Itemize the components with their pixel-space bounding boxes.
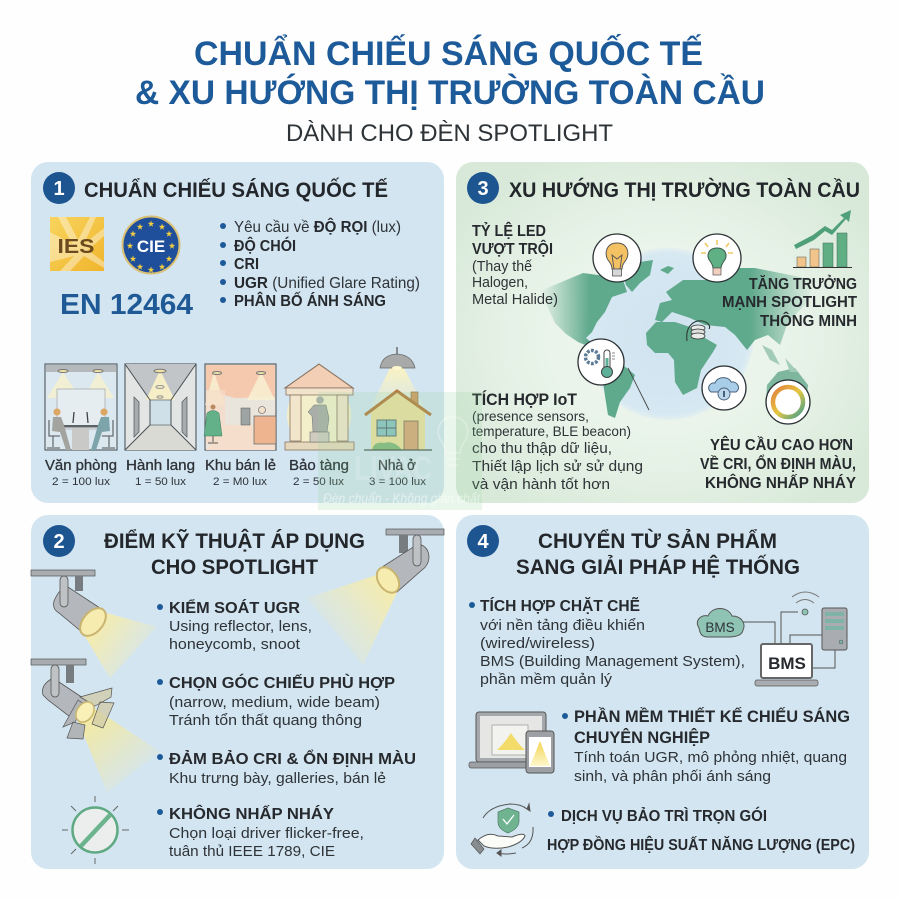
scene labels: 2 = M0 lux <box>213 476 268 488</box>
text: higher CRI requirements: KHÔNG NHẤP NHÁY <box>705 473 856 492</box>
logo: IES <box>50 217 104 271</box>
text: LED share: TỶ LỆ LED <box>472 222 546 240</box>
scene: retail <box>204 364 276 450</box>
logo: CIE: ★ <box>148 220 154 228</box>
scene: corridor <box>125 364 196 450</box>
panel 1: international lighting standards <box>31 162 444 503</box>
badge 3 <box>467 172 499 204</box>
logo: CIE: ★ <box>130 255 136 263</box>
scene labels: 2 = 50 lux <box>293 476 345 488</box>
item: tight integration: (wired/wireless) <box>480 635 595 652</box>
logo: CIE <box>122 216 180 274</box>
text: smart spotlight growth <box>722 275 858 330</box>
watermark: LIVAC <box>354 450 432 488</box>
item: flicker free: Chọn loại driver flicker-free, <box>169 825 364 842</box>
item: maintenance service <box>547 806 855 854</box>
badge 4 <box>467 525 499 557</box>
text: smart spotlight growth: THÔNG MINH <box>760 312 857 330</box>
badge 2 <box>43 525 75 557</box>
text: LED share: VƯỢT TRỘI <box>472 240 553 258</box>
scene labels: Khu bán lẻ <box>205 458 276 474</box>
text: higher CRI requirements: VỀ CRI, ỔN ĐỊNH MÀU, <box>700 454 856 473</box>
requirements list: PHÂN BỐ ÁNH SÁNG <box>234 290 386 310</box>
text: smart spotlight growth: MẠNH SPOTLIGHT <box>722 294 858 311</box>
item: lighting design software <box>562 707 850 785</box>
heading 4: SANG GIẢI PHÁP HỆ THỐNG <box>516 553 800 579</box>
scene labels: 2 = 100 lux <box>52 476 111 488</box>
watermark <box>318 392 482 510</box>
watermark: Đèn chuẩn - Không gian chất <box>323 490 481 506</box>
item: CRI and colour stability <box>157 749 416 787</box>
logo: CIE: ★ <box>166 230 172 238</box>
scene labels: Hành lang <box>126 458 195 474</box>
scene: museum <box>285 364 354 450</box>
icon: no flicker <box>62 796 129 864</box>
item: UGR control: KIỂM SOÁT UGR <box>169 598 300 617</box>
item: lighting design software: PHẦN MỀM THIẾT KẾ CHIẾU SÁNG <box>574 707 850 726</box>
heading 4: CHUYỂN TỪ SẢN PHẨM <box>538 528 777 553</box>
panel 4: from products to system solutions <box>456 515 869 869</box>
logo: CIE: ★ <box>126 242 134 250</box>
text: higher CRI requirements <box>700 435 856 492</box>
item: lighting design software: Tính toán UGR, mô phỏng nhiệt, quang <box>574 749 847 766</box>
heading 4 <box>516 528 800 579</box>
requirements list: ĐỘ CHÓI <box>234 236 296 255</box>
icon: track spotlight right top <box>372 529 444 597</box>
logo: CIE: ★ <box>136 223 144 231</box>
item: maintenance service: DỊCH VỤ BẢO TRÌ TRỌN GÓI <box>561 806 767 825</box>
scene labels <box>45 458 427 488</box>
heading 1: CHUẨN CHIẾU SÁNG QUỐC TẾ <box>84 176 388 202</box>
icon: sensor and thermometer <box>578 339 649 410</box>
item: maintenance service: HỢP ĐỒNG HIỆU SUẤT NĂNG LƯỢNG (EPC) <box>547 835 855 854</box>
text: IoT integration <box>472 390 643 493</box>
logo: CIE: CIE <box>137 237 165 256</box>
item: UGR control <box>157 598 312 653</box>
text: LED share: (Thay thế <box>472 259 532 275</box>
text: IoT integration: temperature, BLE beacon) <box>472 424 631 439</box>
text: IoT integration: TÍCH HỢP IoT <box>472 390 578 409</box>
logo: CIE: ★ <box>166 255 172 263</box>
logo: CIE: ★ <box>168 242 176 250</box>
requirements list: Yêu cầu về ĐỘ RỌI (lux) <box>234 217 401 236</box>
badge 1 <box>43 172 75 204</box>
title: CHUẨN CHIẾU SÁNG QUỐC TẾ <box>194 34 703 73</box>
light beams <box>76 570 398 792</box>
scene labels: 1 = 50 lux <box>135 476 187 488</box>
item: tight integration: phần mềm quản lý <box>480 671 613 688</box>
diagram: BMS network: BMS <box>705 620 735 635</box>
text: higher CRI requirements: YÊU CẦU CAO HƠN <box>710 435 853 454</box>
scene labels: Văn phòng <box>45 458 117 474</box>
logo: IES: IES <box>58 236 94 258</box>
text: IoT integration: Thiết lập lịch sử sử dụng <box>472 458 643 475</box>
text: smart spotlight growth: TĂNG TRƯỞNG <box>749 275 857 293</box>
text: IoT integration: cho thu thập dữ liệu, <box>472 440 612 457</box>
diagram: BMS network <box>697 592 847 686</box>
text: LED share: Metal Halide) <box>472 292 558 308</box>
text: IoT integration: (presence sensors, <box>472 409 589 424</box>
item: beam angle <box>157 673 395 729</box>
text: IoT integration: và vận hành tốt hơn <box>472 476 610 493</box>
item: tight integration: TÍCH HỢP CHẶT CHẼ <box>480 595 640 615</box>
requirements list: UGR (Unified Glare Rating) <box>234 275 420 292</box>
scene labels: 3 = 100 lux <box>369 476 427 488</box>
item: tight integration: BMS (Building Management System), <box>480 653 745 670</box>
scene labels: Bảo tàng <box>289 458 349 474</box>
item: tight integration <box>469 595 745 688</box>
icon: track spotlight with barn doors <box>31 659 114 739</box>
text: LED share <box>472 222 558 308</box>
item: UGR control: Using reflector, lens, <box>169 618 312 635</box>
item: flicker free: KHÔNG NHẤP NHÁY <box>169 804 334 823</box>
logo: CIE: ★ <box>148 266 154 274</box>
text: LED share: Halogen, <box>472 275 528 291</box>
badge 1: 1 <box>53 178 65 200</box>
logo: CIE: ★ <box>130 230 136 238</box>
item: UGR control: honeycomb, snoot <box>169 636 301 653</box>
logo: CIE: ★ <box>158 263 166 271</box>
chart: growth bars and arrow <box>793 210 852 268</box>
icon: amber LED bulb <box>593 234 641 282</box>
item: beam angle: (narrow, medium, wide beam) <box>169 694 380 711</box>
icon: CRI colour ring <box>766 380 810 424</box>
diagram: BMS network: BMS <box>768 654 806 673</box>
logo: CIE: ★ <box>136 263 144 271</box>
heading 2: CHO SPOTLIGHT <box>151 555 318 579</box>
item: CRI and colour stability: ĐẢM BẢO CRI & ỔN ĐỊNH MÀU <box>169 749 416 768</box>
heading 2: ĐIỂM KỸ THUẬT ÁP DỤNG <box>104 528 365 553</box>
icon: track spotlight left top <box>31 570 111 641</box>
item: lighting design software: sinh, và phân phối ánh sáng <box>574 768 771 785</box>
icon: cloud data <box>702 366 746 410</box>
badge 3: 3 <box>477 178 489 200</box>
icon: hand with shield <box>471 804 533 856</box>
icon: laptop and tablet <box>469 712 554 773</box>
panel 3: global market trends <box>456 162 869 503</box>
item: flicker free <box>157 804 364 860</box>
badge 2: 2 <box>53 531 65 553</box>
logo: CIE: ★ <box>158 223 166 231</box>
world map globe <box>540 248 815 420</box>
title <box>135 34 765 112</box>
heading 3: XU HƯỚNG THỊ TRƯỜNG TOÀN CẦU <box>509 177 860 202</box>
icon: green smart bulb <box>693 234 741 282</box>
item: tight integration: với nền tảng điều khiển <box>480 617 645 634</box>
badge 4: 4 <box>477 531 489 553</box>
item: beam angle: CHỌN GÓC CHIẾU PHÙ HỢP <box>169 673 395 692</box>
heading 2 <box>104 528 365 579</box>
requirements list: CRI <box>234 256 259 273</box>
item: beam angle: Tránh tổn thất quang thông <box>169 712 362 729</box>
standard: EN 12464: EN 12464 <box>60 289 193 321</box>
scene: office <box>45 364 117 450</box>
subtitle: DÀNH CHO ĐÈN SPOTLIGHT <box>286 120 613 147</box>
item: CRI and colour stability: Khu trưng bày, galleries, bán lẻ <box>169 770 386 787</box>
item: lighting design software: CHUYÊN NGHIỆP <box>574 728 710 747</box>
icon: coil <box>687 321 710 341</box>
scene: home with pendant lamp <box>364 347 432 450</box>
item: flicker free: tuân thủ IEEE 1789, CIE <box>169 843 335 860</box>
panel 2: technical points for spotlights <box>31 515 444 869</box>
title: & XU HƯỚNG THỊ TRƯỜNG TOÀN CẦU <box>135 74 765 112</box>
scene labels: Nhà ở <box>378 458 416 474</box>
requirements list <box>220 217 420 310</box>
